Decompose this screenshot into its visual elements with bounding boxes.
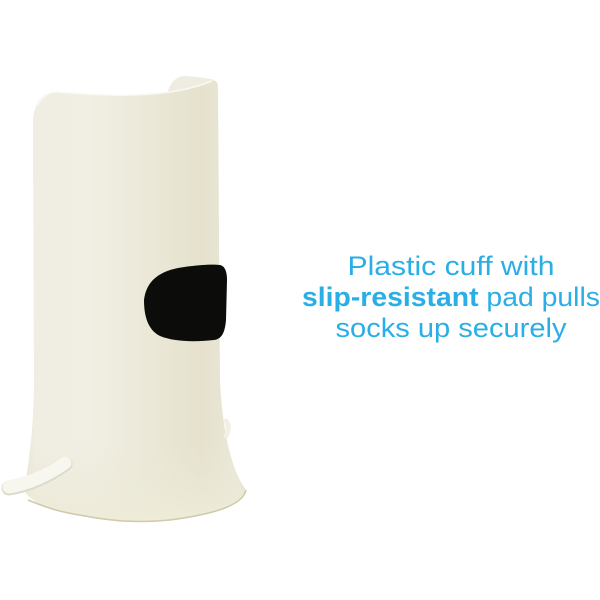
rope left end shadow [9, 464, 65, 488]
cuff flared base shading [24, 440, 246, 521]
caption line 3: socks up securely [336, 313, 567, 343]
cuff body [24, 81, 246, 521]
caption text [302, 251, 600, 343]
slip-resistant black pad [144, 265, 227, 341]
rope right end [226, 421, 228, 436]
cuff top edge highlight [38, 81, 212, 105]
caption line 2: slip-resistant pad pulls [302, 282, 600, 312]
cuff bottom edge highlight [28, 490, 246, 521]
product photo: plastic cuff [9, 76, 246, 521]
rope left end [9, 463, 65, 487]
caption line 1: Plastic cuff with [348, 251, 554, 281]
back flap of cuff [168, 76, 218, 92]
